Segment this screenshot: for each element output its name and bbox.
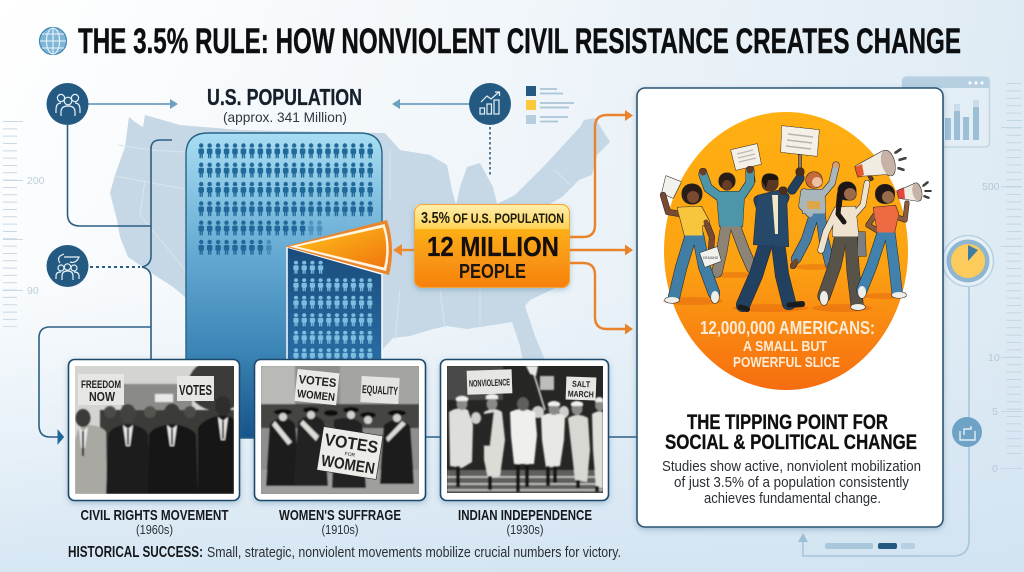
dotted line below chart icon (489, 127, 491, 176)
arrow to population heading from left (88, 99, 178, 109)
sign: votes for women small: VOTES (298, 372, 337, 390)
right ruler scale (982, 83, 1022, 475)
connector between photos and card (426, 436, 637, 438)
population bar (186, 133, 382, 438)
sign: freedom now: FREEDOM (81, 379, 121, 391)
panel: tipping point card (637, 88, 943, 527)
connector lines left side (39, 125, 172, 444)
round export icon (952, 417, 982, 447)
label: Indian independence: (1930s) (506, 523, 544, 537)
leaflet (700, 247, 721, 267)
circle caption (700, 318, 875, 371)
text: explanation: Studies show active, nonviolent mobilization (662, 458, 921, 475)
icon: growth chart (469, 83, 511, 125)
text: explanation: achieves fundamental change. (704, 490, 881, 507)
circle caption: POWERFUL SLICE (733, 354, 840, 371)
sign: equality (360, 376, 400, 404)
protesters illustration (662, 126, 931, 310)
icon: globe (40, 28, 66, 54)
sign: votes for women large (317, 427, 383, 479)
gauge pie icon (942, 236, 994, 286)
woman in cream blouse (820, 182, 867, 310)
photo card: Indian independence (440, 360, 608, 500)
label: civil rights: (1960s) (136, 523, 173, 537)
arrow from box to wedge (393, 244, 414, 256)
pictogram: 3.5 percent (292, 260, 374, 366)
label: Indian independence (458, 507, 592, 537)
leaflet: DEMAND (703, 256, 719, 260)
label: women's suffrage: (1910s) (322, 523, 358, 537)
sign: votes (177, 376, 214, 401)
small megaphone (897, 182, 931, 202)
orange arrows to tipping point card (570, 110, 633, 334)
progress pills (825, 543, 915, 549)
left ruler scale: 90 (27, 285, 39, 297)
label: Indian independence: INDIAN INDEPENDENCE (458, 507, 592, 524)
photo: suffrage march (261, 366, 419, 494)
photo card: women's suffrage (254, 360, 426, 500)
sign: votes for women small (294, 369, 339, 405)
sign: freedom now: NOW (89, 390, 115, 404)
lower-right connector and gauge line (803, 285, 969, 556)
sign: freedom now (78, 374, 124, 405)
map of the United States (110, 115, 610, 380)
callout: 12 million: 12 MILLION (427, 231, 559, 262)
callout: 12 million: 3.5% OF U.S. POPULATION (421, 210, 564, 227)
heading: U.S. population (207, 84, 362, 125)
highlighted 3.5 percent panel (287, 247, 382, 370)
sign: votes: VOTES (179, 382, 212, 399)
sign: salt march: SALT (572, 379, 591, 389)
text: historical success (68, 544, 621, 561)
woman with red hair (793, 162, 839, 266)
pictogram: total population (197, 143, 374, 259)
text: historical success: Small, strategic, nonviolent movements mobilize crucial numbers for victory. (207, 544, 621, 561)
small arrow under card (798, 533, 808, 542)
sign: votes for women small: WOMEN (296, 388, 336, 404)
man in navy suit (740, 168, 804, 309)
right ruler scale: 5 (992, 406, 998, 418)
orange wedge slice (285, 220, 392, 275)
callout: 12 million: PEOPLE (459, 261, 526, 283)
left ruler scale: 200 (27, 175, 45, 187)
icon: people group (46, 83, 88, 125)
photo: civil rights march (75, 366, 234, 494)
sign: equality: EQUALITY (362, 384, 398, 398)
right ruler scale: 500 (982, 181, 1000, 193)
sign: votes for women large: FOR (344, 451, 356, 459)
text: explanation: of just 3.5% of a population consistently (674, 474, 909, 491)
sign: nonviolence: NONVIOLENCE (469, 377, 510, 390)
orange circle (664, 112, 908, 390)
man in teal sweater (700, 166, 754, 272)
photo: salt march (447, 366, 605, 493)
callout: 12 million (414, 204, 570, 288)
icon: people with arrows (46, 245, 88, 287)
sign held by man in teal (731, 144, 761, 182)
label: civil rights (80, 507, 228, 537)
heading: U.S. population: (approx. 341 Million) (223, 109, 347, 125)
left ruler scale (3, 121, 45, 327)
ground shadows (663, 264, 907, 312)
woman in yellow shirt (663, 184, 719, 303)
arrow to population heading from right (392, 99, 470, 109)
sign: salt march (566, 376, 596, 401)
right ruler scale: 0 (992, 463, 998, 475)
right ruler scale: 10 (988, 352, 1000, 364)
heading: tipping point (665, 411, 917, 454)
big megaphone (855, 149, 906, 180)
label: civil rights: CIVIL RIGHTS MOVEMENT (80, 507, 228, 524)
sign: salt march: MARCH (568, 389, 594, 399)
text: explanation (662, 458, 921, 507)
sign: votes for women large: VOTES (323, 430, 379, 457)
heading: tipping point: SOCIAL & POLITICAL CHANGE (665, 431, 917, 454)
label: women's suffrage: WOMEN'S SUFFRAGE (279, 507, 401, 524)
sign: votes for women large: WOMEN (320, 453, 376, 478)
label: women's suffrage (279, 507, 401, 537)
sign: nonviolence (467, 369, 512, 395)
photo card: civil rights (68, 359, 248, 500)
heading: U.S. population: U.S. POPULATION (207, 84, 362, 110)
circle caption: 12,000,000 AMERICANS: (700, 318, 875, 338)
legend (526, 86, 574, 124)
sign held by man in suit (781, 126, 819, 174)
paper held by woman in yellow (662, 176, 681, 198)
text: historical success: HISTORICAL SUCCESS: (68, 544, 203, 561)
woman in red top (858, 184, 907, 298)
circle caption: A SMALL BUT (743, 338, 827, 355)
heading: tipping point: THE TIPPING POINT FOR (687, 411, 888, 434)
faint dashboard window (902, 77, 990, 147)
